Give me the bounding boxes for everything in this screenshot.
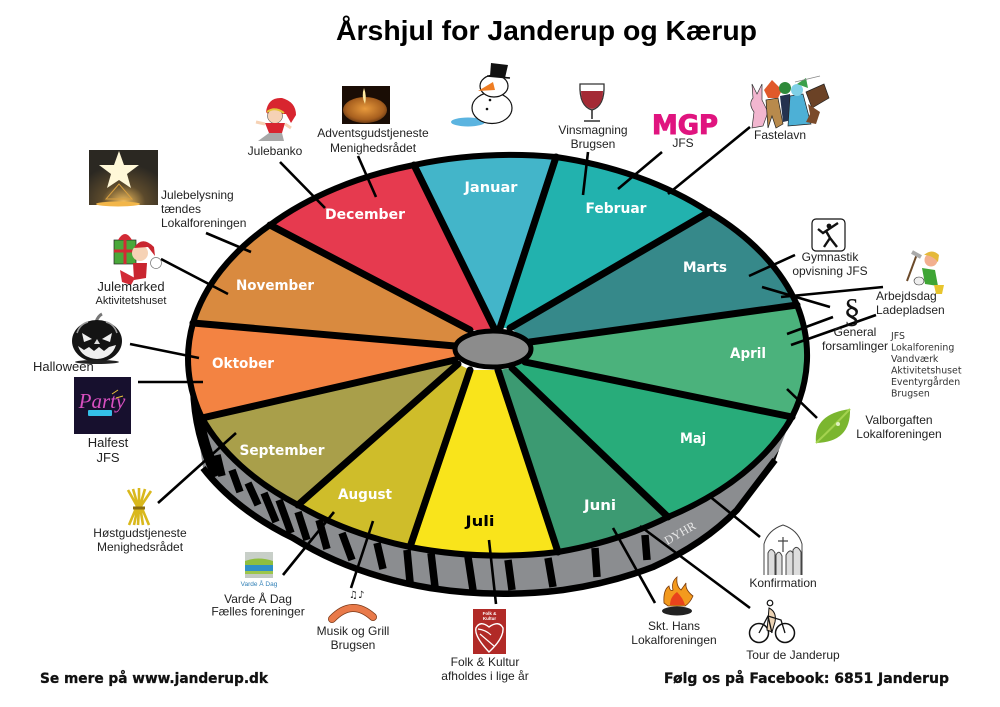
month label: April: April bbox=[730, 346, 766, 362]
label: Musik og Grill: Musik og Grill bbox=[317, 624, 389, 638]
wedge: November bbox=[193, 225, 470, 346]
wedge: August bbox=[298, 364, 470, 547]
label: Halfest: JFS bbox=[96, 450, 120, 465]
label: Julemarked: Aktivitetshuset bbox=[96, 295, 166, 307]
label: Høstgudstjeneste: Høstgudstjeneste bbox=[93, 526, 187, 540]
label: General forsamlinger: forsamlinger bbox=[822, 339, 888, 353]
icon: Folk og Kultur logo bbox=[473, 609, 506, 654]
label: General forsamlinger: General bbox=[834, 325, 876, 339]
wedge: Maj bbox=[512, 362, 792, 517]
icon: pumpkin bbox=[72, 314, 122, 364]
wedge: Juni bbox=[498, 368, 668, 552]
icon: MGP logo: MGP bbox=[652, 110, 718, 141]
label: Varde Å Dag: Varde Å Dag bbox=[224, 592, 292, 606]
icon: worker bbox=[907, 252, 944, 294]
wheel rim bbox=[188, 155, 807, 556]
label: Skt. Hans: Skt. Hans bbox=[648, 619, 700, 633]
month label: Juli: Juli bbox=[464, 514, 494, 530]
month label: Januar: Januar bbox=[463, 180, 518, 196]
wedge: Februar bbox=[500, 157, 709, 328]
label: Vinsmagning: Vinsmagning bbox=[558, 123, 628, 137]
label: Gymnastik: opvisning JFS bbox=[792, 264, 868, 278]
list: organisations: JFS bbox=[891, 331, 905, 342]
spokes bbox=[193, 157, 797, 552]
label: Adventsgudstjeneste: Adventsgudstjeneste bbox=[317, 126, 429, 140]
month label: Marts: Marts bbox=[683, 260, 727, 276]
icon: wine glass bbox=[580, 84, 604, 121]
footer: website: Se mere på www.janderup.dk bbox=[40, 670, 268, 687]
wedge: December bbox=[270, 165, 495, 330]
label: Vinsmagning: Brugsen bbox=[571, 137, 615, 151]
label: MGP JFS: JFS bbox=[672, 136, 694, 150]
wedge: September bbox=[202, 360, 458, 505]
label: Skt. Hans: Lokalforeningen bbox=[631, 633, 717, 647]
icon: gymnastics bbox=[812, 219, 845, 251]
label: Julebelysning: Julebelysning bbox=[161, 188, 234, 202]
label: Valborgaften: Lokalforeningen bbox=[856, 427, 942, 441]
icon: elf with present bbox=[114, 234, 162, 285]
list: organisations: Eventyrgården bbox=[891, 377, 960, 388]
icon: candle bbox=[342, 86, 390, 124]
label: Høstgudstjeneste: Menighedsrådet bbox=[97, 540, 184, 554]
wheel edge band bbox=[190, 388, 792, 594]
icon: Julebanko elf bbox=[256, 98, 296, 141]
footer: Facebook: Følg os på Facebook: 6851 Janderup bbox=[664, 670, 949, 687]
icon: paragraph sign: § bbox=[844, 293, 860, 330]
label: Gymnastik: Gymnastik bbox=[802, 250, 858, 264]
label: Konfirmation: Konfirmation bbox=[749, 576, 817, 590]
icon: Varde Å Dag logo: Varde Å Dag bbox=[241, 579, 278, 588]
label: Halfest: Halfest bbox=[88, 435, 128, 450]
label: Julebanko: Julebanko bbox=[248, 144, 303, 158]
month label: September: September bbox=[240, 443, 325, 459]
wedge: Juli bbox=[410, 370, 558, 556]
icon: confirmation church bbox=[764, 525, 802, 575]
icon: cyclist bbox=[750, 600, 794, 642]
list: organisations: Vandværk bbox=[891, 354, 939, 365]
label: Arbejdsdag: Ladepladsen bbox=[876, 303, 945, 317]
icon: illuminated star bbox=[89, 150, 158, 206]
icon: party poster: Party bbox=[78, 389, 126, 413]
label: Valborgaften: Valborgaften bbox=[865, 413, 933, 427]
label: Varde Å Dag: Fælles foreninger bbox=[211, 604, 305, 618]
wedge: Oktober bbox=[188, 323, 455, 418]
wedge: April bbox=[525, 305, 807, 417]
wedge: Marts bbox=[510, 212, 797, 342]
wedge: Januar bbox=[414, 155, 556, 330]
icon: Varde Å Dag logo bbox=[241, 552, 278, 588]
wheel: year wheel disc bbox=[188, 155, 807, 594]
list: organisations: Lokalforening bbox=[891, 342, 954, 354]
month label: December: December bbox=[325, 207, 406, 223]
hub bbox=[455, 331, 531, 367]
icon: party poster bbox=[74, 377, 131, 434]
list: organisations: Aktivitetshuset bbox=[891, 366, 962, 376]
month label: Maj: Maj bbox=[680, 431, 706, 447]
label: Folk og Kultur: Folk & Kultur bbox=[451, 655, 519, 669]
icon: fastelavn figures bbox=[751, 76, 829, 128]
label: Halloween: Halloween bbox=[33, 359, 94, 374]
label: Julemarked: Julemarked bbox=[97, 279, 165, 294]
month label: Februar: Februar bbox=[586, 201, 647, 217]
label: Fastelavn: Fastelavn bbox=[754, 128, 806, 142]
month label: Juni: Juni bbox=[583, 498, 616, 514]
month label: August: August bbox=[338, 487, 392, 503]
label: Folk og Kultur: afholdes i lige år bbox=[441, 669, 529, 683]
band text: DYHR: DYHR bbox=[662, 518, 698, 548]
label: Musik og Grill: Brugsen bbox=[331, 638, 375, 652]
label: Julebelysning: tændes bbox=[161, 202, 201, 216]
icon: sausage and notes bbox=[332, 590, 373, 619]
icon: sausage and notes: ♫♪ bbox=[349, 590, 364, 601]
label: Tour de Janderup: Tour de Janderup bbox=[746, 648, 840, 662]
leader lines bbox=[130, 127, 883, 608]
label: Julebelysning: Lokalforeningen bbox=[161, 216, 246, 230]
icon: snowman bbox=[451, 63, 512, 126]
title: Årshjul for Janderup og Kærup bbox=[336, 15, 757, 46]
icon: leaf bbox=[816, 409, 850, 443]
label: Adventsgudstjeneste: Menighedsrådet bbox=[330, 141, 417, 155]
month label: November: November bbox=[236, 278, 315, 294]
icon: bonfire bbox=[662, 577, 693, 616]
month label: Oktober: Oktober bbox=[212, 356, 275, 372]
list: organisations: Brugsen bbox=[891, 388, 930, 400]
icon: wheat sheaf bbox=[128, 488, 151, 525]
label: Arbejdsdag: Arbejdsdag bbox=[876, 289, 937, 303]
icon: Folk og Kultur logo: Kultur bbox=[483, 616, 496, 621]
icon: Folk og Kultur logo: Folk & bbox=[483, 611, 497, 616]
